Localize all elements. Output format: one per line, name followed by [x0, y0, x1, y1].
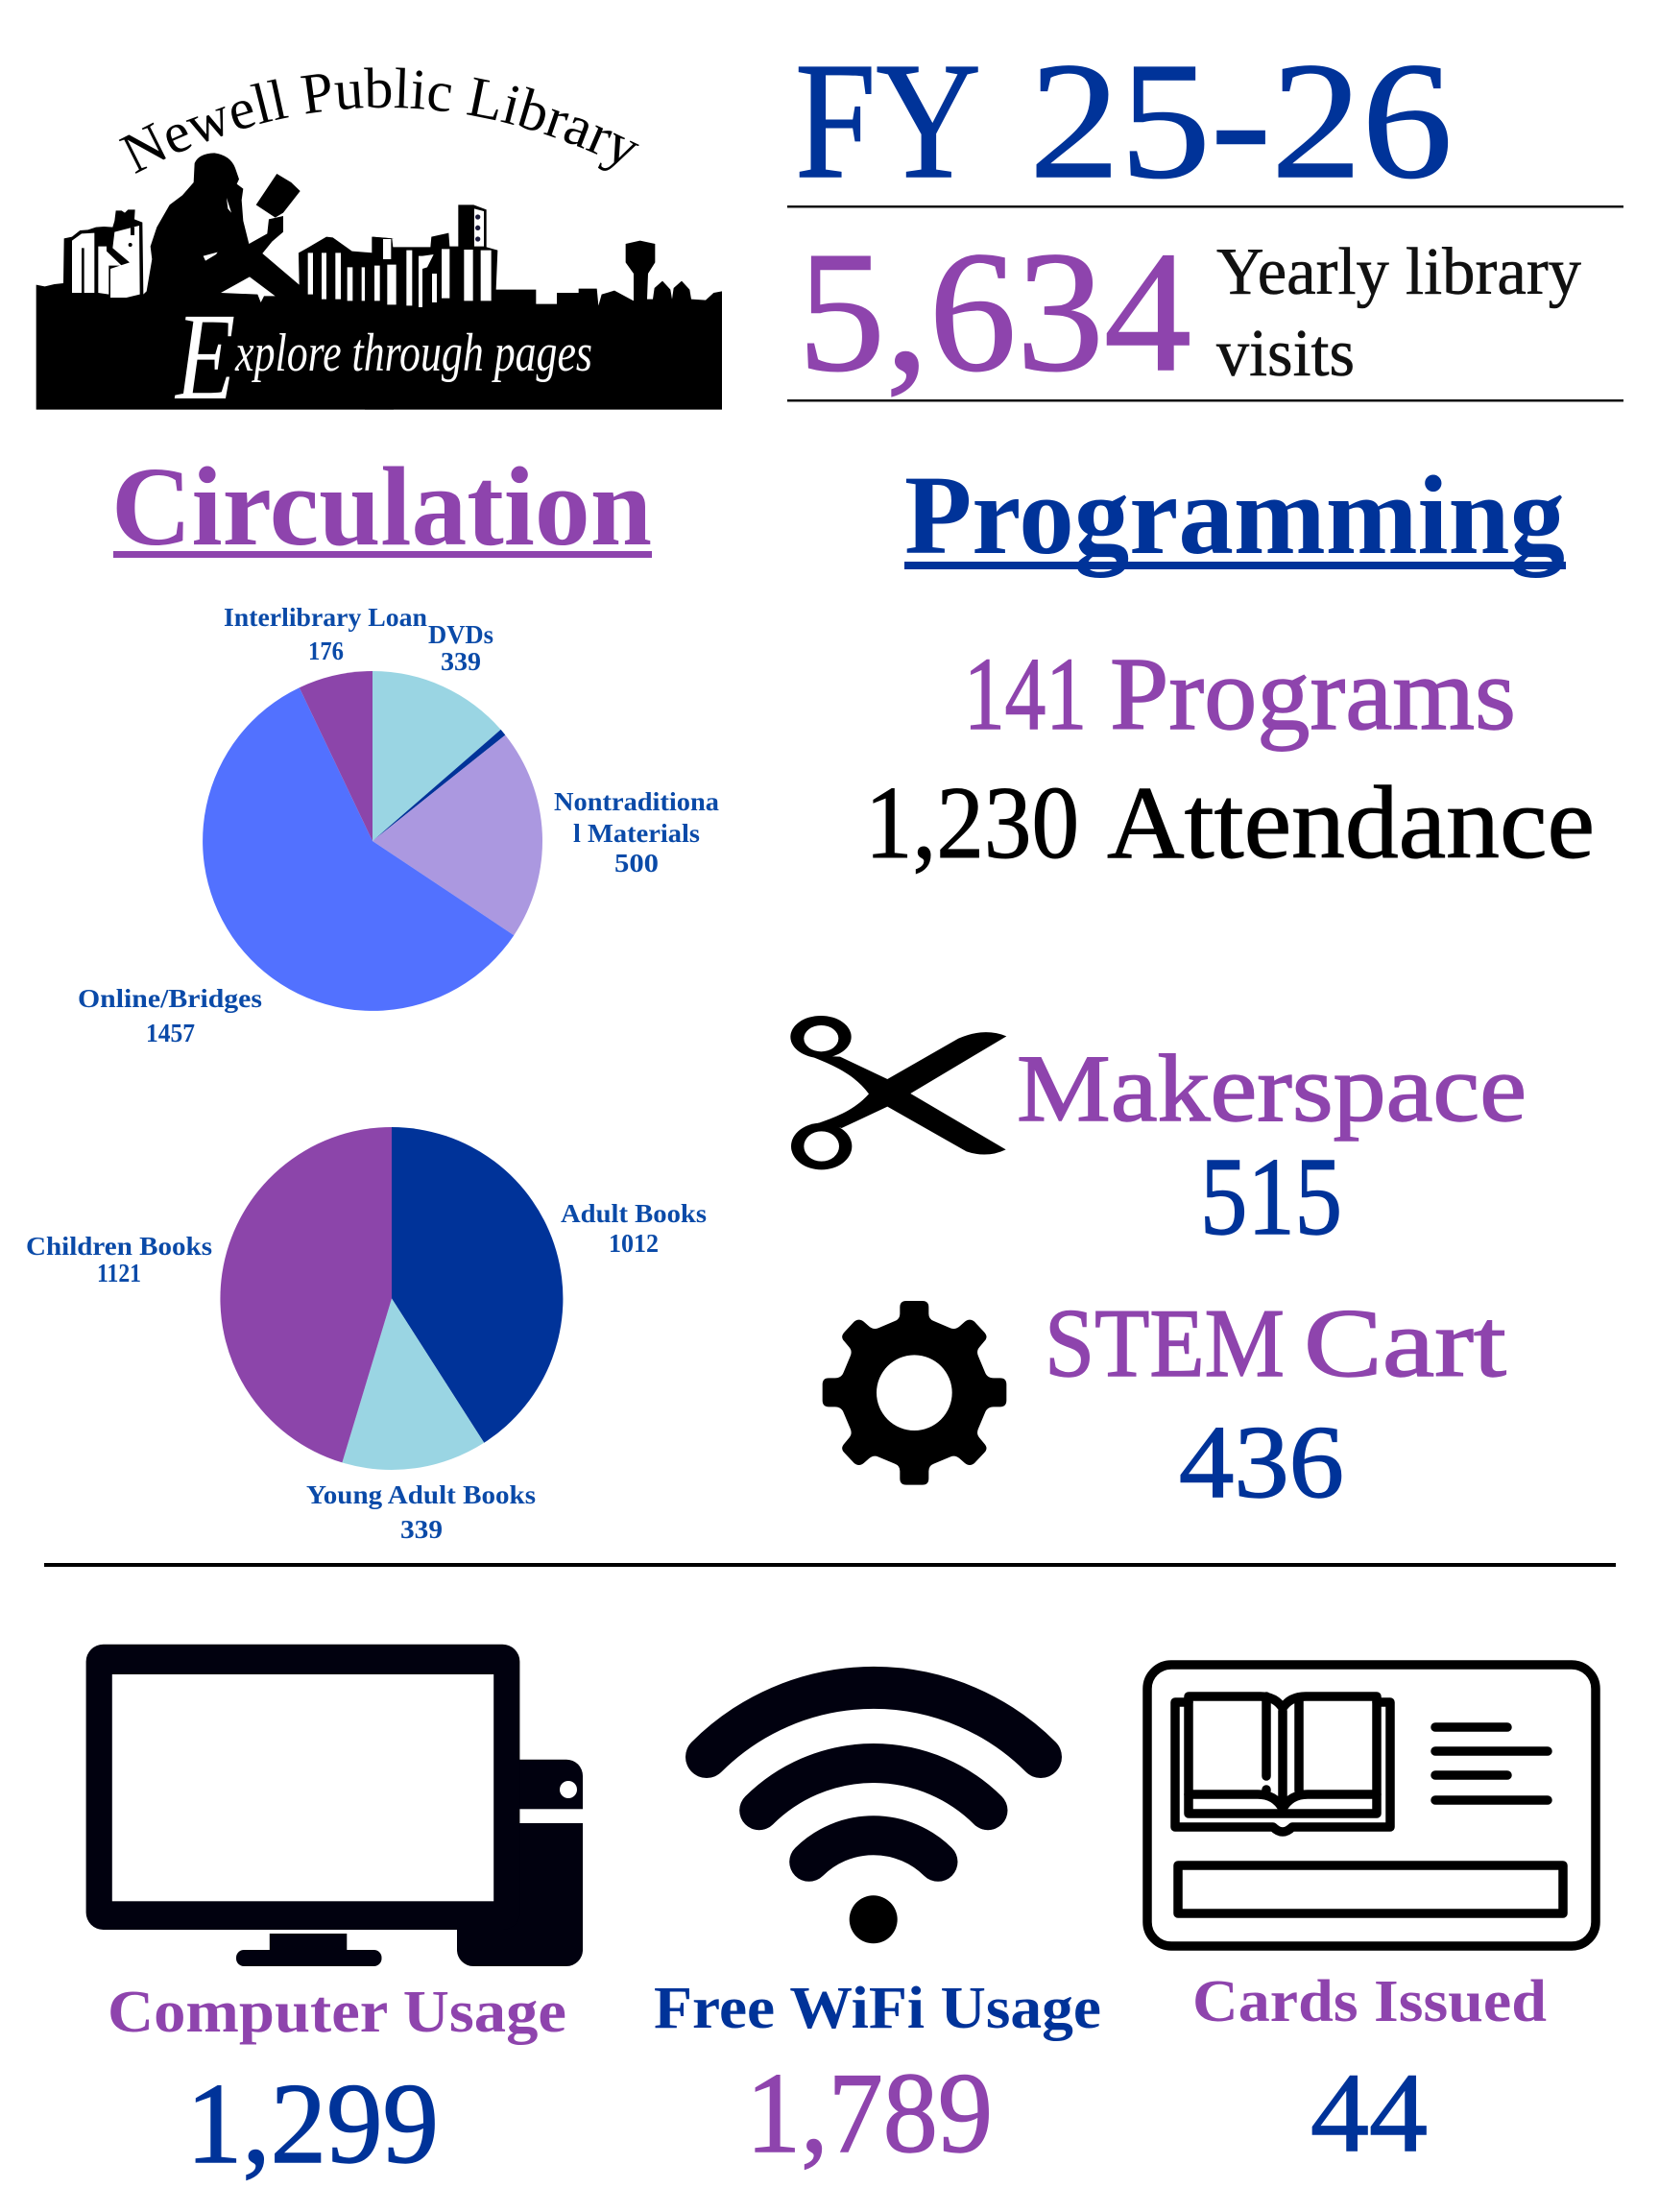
label: Children Books: Children Books	[26, 1232, 212, 1261]
book back cover	[1175, 1702, 1390, 1832]
slice: small dark sliver	[373, 730, 505, 841]
book pages	[1189, 1696, 1377, 1814]
icon: computer	[86, 1645, 583, 1966]
label: DVDs: 339	[441, 647, 481, 676]
makerspace label: Makerspace	[1017, 1035, 1527, 1142]
programs count: Programs	[1110, 637, 1516, 752]
STEM Cart label: Cart	[1304, 1289, 1506, 1398]
wifi usage label: Free WiFi Usage	[654, 1976, 1101, 2041]
logo skyline silhouette left with reader	[36, 153, 394, 410]
slice: DVDs	[373, 671, 501, 841]
label: Online/Bridges: Online/Bridges	[78, 984, 262, 1013]
visits caption: Yearly library	[1216, 235, 1581, 309]
slice: Children Books	[220, 1127, 392, 1462]
divider rule top	[787, 205, 1623, 207]
label: Online/Bridges: 1457	[146, 1019, 195, 1047]
title: FY 25-26: FY	[795, 28, 981, 213]
slice: Adult Books	[392, 1127, 563, 1443]
pie chart: books by audience	[26, 1127, 707, 1544]
text lines	[1435, 1727, 1548, 1800]
label: Nontraditional Materials: 500	[614, 849, 659, 878]
section divider	[44, 1563, 1616, 1567]
slice: Young Adult Books	[342, 1298, 484, 1470]
slice: Nontraditional Materials	[373, 735, 542, 935]
STEM Cart label: STEM	[1045, 1289, 1285, 1398]
slice: Online/Bridges	[203, 687, 514, 1011]
label: Young Adult Books: 339	[400, 1515, 443, 1544]
label: Adult Books: 1012	[609, 1229, 659, 1258]
icon: gear	[823, 1301, 1006, 1485]
cards issued label: Cards Issued	[1192, 1969, 1547, 2034]
label: Interlibrary Loan: 176	[308, 637, 344, 665]
card outline	[1147, 1665, 1596, 1946]
heading: Programming: Programming	[904, 452, 1565, 578]
programs count: 141	[964, 637, 1087, 752]
divider rule bottom	[787, 399, 1623, 401]
cards issued value: 44	[1310, 2050, 1428, 2176]
label: Young Adult Books: Young Adult Books	[306, 1480, 536, 1509]
logo tagline: E	[174, 288, 235, 426]
label: Children Books: 1121	[97, 1259, 141, 1287]
attendance count: Attendance	[1107, 766, 1595, 880]
computer usage value: 1,299	[186, 2059, 439, 2187]
visits number: 5,634	[798, 216, 1191, 407]
label: Nontraditional Materials: Nontraditiona	[554, 787, 720, 816]
heading: Circulation: Circulation	[111, 444, 652, 569]
icon: scissors	[790, 1016, 1006, 1169]
icon: library card	[1147, 1665, 1596, 1946]
makerspace value: 515	[1200, 1136, 1342, 1258]
icon: wifi	[707, 1688, 1041, 1943]
logo curved title: Newell Public Library	[119, 67, 639, 174]
attendance count: 1,230	[865, 766, 1079, 880]
label: Nontraditional Materials: l Materials	[573, 819, 700, 848]
title: FY 25-26: 25-26	[1029, 28, 1453, 213]
STEM Cart value: 436	[1179, 1406, 1344, 1520]
stat: yearly library visits	[798, 216, 1581, 407]
slice: Interlibrary Loan	[300, 671, 373, 841]
computer usage label: Computer Usage	[108, 1980, 566, 2045]
logo tagline: xplore through pages	[234, 324, 592, 383]
pie chart: circulation by format	[78, 603, 720, 1047]
label: Interlibrary Loan: Interlibrary Loan	[224, 603, 427, 632]
barcode box	[1178, 1865, 1563, 1913]
label: DVDs: DVDs	[428, 620, 493, 649]
logo skyline silhouette right with water tower	[365, 204, 722, 410]
visits caption: visits	[1216, 317, 1355, 391]
logo: Newell Public Library	[36, 67, 722, 426]
label: Adult Books: Adult Books	[561, 1199, 707, 1228]
wifi usage value: 1,789	[746, 2049, 993, 2176]
